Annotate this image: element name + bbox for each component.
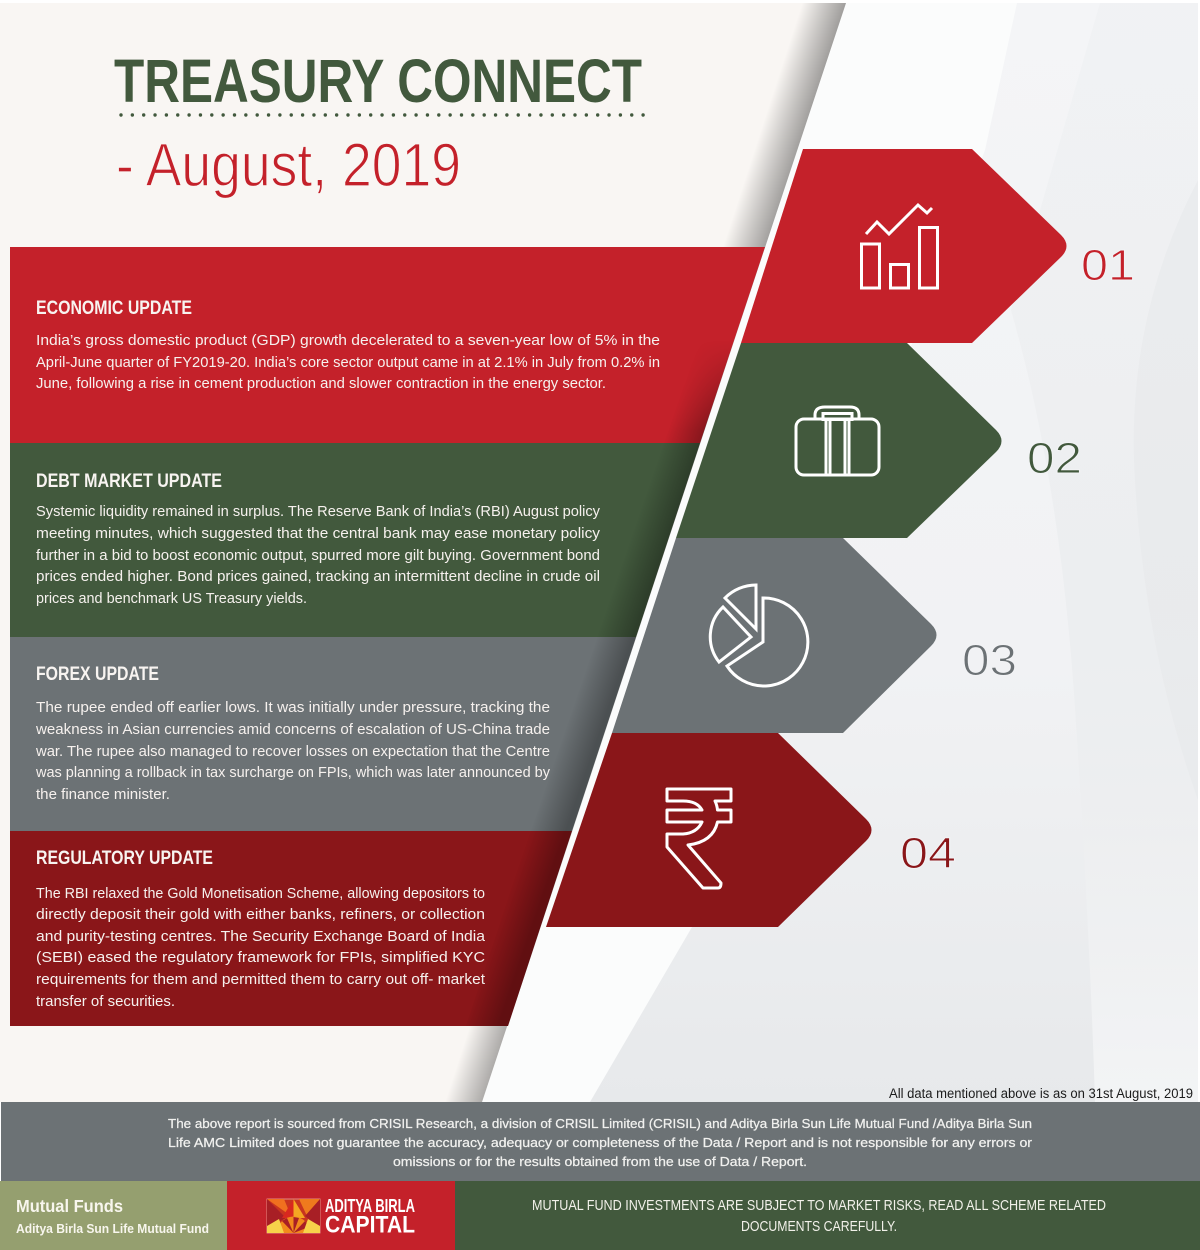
heading: debt market update: DEBT MARKET UPDATE: [36, 470, 222, 492]
text: regulatory body: requirements for them and permitted them to carry out off- market: [36, 971, 486, 988]
text: regulatory body: The RBI relaxed the Gold Monetisation Scheme, allowing depositors to: [36, 885, 485, 902]
arrow tab 01: [741, 149, 1135, 343]
text: debt market body: further in a bid to boost economic output, spurred more gilt buying. Government bond: [36, 547, 600, 564]
text: forex body: [35, 699, 550, 803]
arrow tab 04: [546, 733, 956, 927]
text: debt market body: [36, 503, 601, 607]
icon: briefcase: [796, 407, 879, 475]
number 02: 02: [1027, 434, 1082, 483]
background: left cream panel: [0, 3, 846, 1102]
footer: risk statement: MUTUAL FUND INVESTMENTS ARE SUBJECT TO MARKET RISKS, READ ALL SCHEME RELATED: [532, 1197, 1106, 1214]
text: debt market body: prices and benchmark US Treasury yields.: [36, 590, 307, 607]
text: regulatory body: and purity-testing centres. The Security Exchange Board of India: [36, 928, 486, 945]
footer: mutual funds: Aditya Birla Sun Life Mutual Fund: [16, 1221, 209, 1236]
footer: mutual funds: Mutual Funds: [16, 1196, 123, 1216]
disclaimer bar: The above report is sourced from CRISIL Research, a division of CRISIL Limited (CRISIL) and Aditya Birla Sun Life Mutual Fund /Aditya Birla Sun: [168, 1116, 1032, 1131]
text: logo wordmark: CAPITAL: [325, 1212, 415, 1238]
disclaimer bar: Life AMC Limited does not guarantee the accuracy, adequacy or completeness of the Data / Report and is not responsible for any errors or: [168, 1135, 1033, 1150]
number 01: 01: [1081, 241, 1135, 290]
text: economic update body: June, following a rise in cement production and slower contraction in the energy sector.: [36, 375, 606, 392]
heading: forex update: FOREX UPDATE: [36, 663, 159, 685]
icon: pie chart: [710, 585, 808, 686]
text: economic update body: April-June quarter of FY2019-20. India’s core sector output came in at 2.1% in July from 0.2% in: [36, 354, 660, 371]
text: regulatory body: (SEBI) eased the regulatory framework for FPIs, simplified KYC: [36, 949, 485, 966]
icon: logo mark: [267, 1199, 320, 1233]
panel: forex update: [10, 637, 636, 831]
icon: rupee symbol: [667, 789, 731, 888]
disclaimer bar: [1, 1102, 1200, 1181]
title block: [114, 47, 644, 199]
panel: debt market update: [10, 443, 700, 637]
text: debt market body: Systemic liquidity remained in surplus. The Reserve Bank of India’s (RBI) August policy: [36, 503, 600, 520]
number 04: 04: [900, 829, 956, 878]
text: logo wordmark: [325, 1196, 415, 1238]
text: economic update body: [36, 332, 660, 392]
footer: risk statement: [455, 1181, 1200, 1250]
text: economic update body: India’s gross domestic product (GDP) growth decelerated to a seven-year low of 5% in the: [36, 332, 660, 349]
text: logo wordmark: ADITYA BIRLA: [325, 1196, 415, 1216]
footer: mutual funds: [0, 1181, 227, 1250]
panel: economic update: [10, 247, 765, 443]
heading: economic update: ECONOMIC UPDATE: [36, 297, 192, 319]
data date note: All data mentioned above is as on 31st August, 2019: [889, 1086, 1193, 1101]
text: forex body: The rupee ended off earlier lows. It was initially under pressure, tracking the: [36, 699, 550, 716]
title: TREASURY CONNECT: [114, 47, 642, 115]
number 03: 03: [962, 636, 1017, 685]
text: forex body: was planning a rollback in tax surcharge on FPIs, which was later announced by: [35, 764, 550, 781]
text: forex body: the finance minister.: [36, 786, 170, 803]
subtitle: - August, 2019: [116, 131, 461, 199]
text: regulatory body: transfer of securities.: [36, 993, 175, 1010]
text: debt market body: prices ended higher. Bond prices gained, tracking an intermittent decline in crude oil: [36, 568, 600, 585]
text: regulatory body: directly deposit their gold with either banks, refiners, or collection: [36, 906, 485, 923]
footer: logo panel: [227, 1181, 455, 1250]
heading: regulatory update: REGULATORY UPDATE: [36, 847, 213, 869]
text: debt market body: meeting minutes, which suggested that the central bank may ease monetary policy: [36, 525, 601, 542]
disclaimer bar: omissions or for the results obtained from the use of Data / Report.: [393, 1154, 807, 1169]
arrow tab 02: [676, 343, 1082, 538]
text: forex body: weakness in Asian currencies amid concerns of escalation of US-China trade: [35, 721, 550, 738]
edge shadow over panels: [470, 352, 730, 1026]
text: forex body: war. The rupee also managed to recover losses on expectation that the Centre: [35, 743, 550, 760]
panel: regulatory update: [10, 831, 572, 1026]
text: regulatory body: [36, 885, 486, 1010]
icon: bar chart with trend line: [862, 205, 938, 288]
footer: risk statement: DOCUMENTS CAREFULLY.: [741, 1218, 897, 1235]
arrow tab 03: [612, 538, 1017, 733]
